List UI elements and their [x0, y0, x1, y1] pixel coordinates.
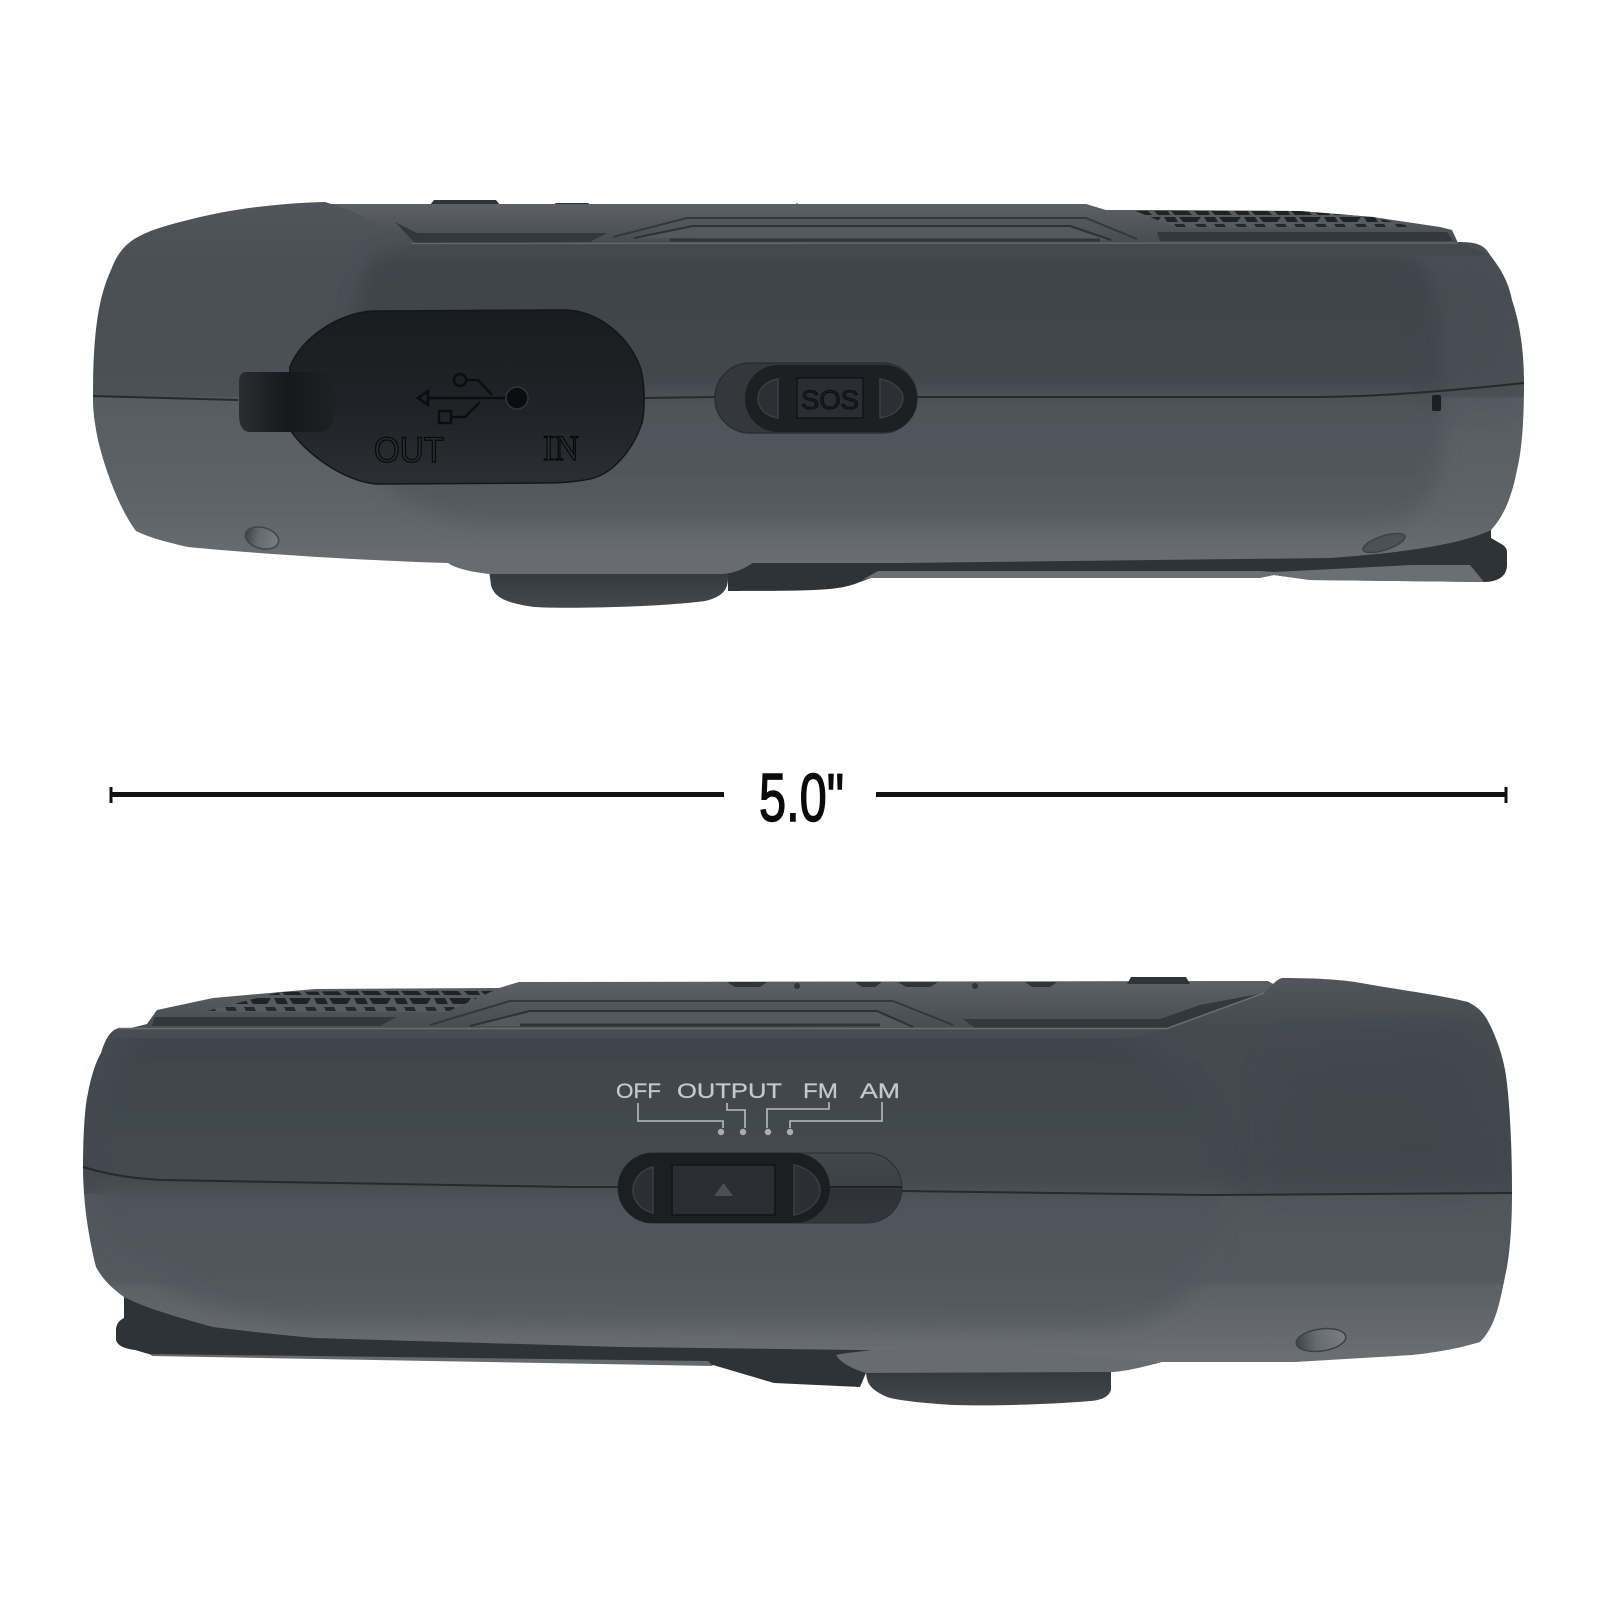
mounting clip: [116, 1295, 880, 1387]
door cover: [287, 310, 644, 484]
circuit leader lines: [638, 1102, 882, 1128]
panel shadow bands: [152, 993, 1264, 1028]
left grip: [758, 379, 778, 418]
slider: [618, 1153, 830, 1223]
switch recess: [715, 363, 917, 433]
body top highlight: [412, 242, 1458, 244]
top panel: [325, 204, 1458, 243]
left grip: [633, 1167, 653, 1213]
right grip: [794, 1165, 820, 1215]
clip light strip: [862, 565, 1484, 582]
right grip: [880, 379, 903, 418]
recessed housing shade: [350, 252, 1444, 522]
mounting clip: [728, 505, 1507, 591]
recessed housing shade: [188, 1286, 1183, 1326]
upper rim: [1490, 254, 1491, 255]
mode switch: [618, 1153, 902, 1223]
door tab: [239, 372, 336, 432]
top edge buttons: [430, 200, 873, 208]
seam: [93, 383, 1524, 400]
device: top side view with USB door and SOS switch: [80, 195, 1540, 608]
speaker grille: [203, 989, 497, 1012]
USB icon: [418, 374, 505, 423]
seam: [83, 1167, 1512, 1195]
left segment: [110, 792, 724, 797]
ridged panel bands: [636, 226, 1111, 240]
label AM: AM: [860, 1080, 900, 1103]
right end tick: [1504, 787, 1508, 803]
slider button: [672, 1165, 775, 1215]
USB door: [239, 310, 644, 484]
switch labels: [616, 1080, 900, 1103]
dial cap: [448, 554, 754, 574]
ridged panel lines: [613, 218, 1137, 240]
indicator dots: [718, 1129, 793, 1135]
housing body: [80, 195, 1540, 575]
dimension line: 5.0 inches: [110, 760, 1508, 836]
USB icon port dot: [506, 387, 528, 409]
left end tick: [110, 787, 112, 803]
track seam: [825, 1186, 902, 1188]
pinhole: [1432, 395, 1441, 411]
top edge buttons: [727, 977, 1190, 989]
screw hole right: [1361, 530, 1407, 556]
body top highlight: [119, 993, 1264, 1028]
triangle mark: [714, 1183, 733, 1196]
device: bottom side view with mode switch: [70, 970, 1530, 1405]
speaker grille: [1133, 210, 1413, 228]
thumb dial: [866, 1370, 1111, 1405]
rim under panel: [110, 1028, 1167, 1038]
clip light strip: [150, 1354, 713, 1366]
label OFF: OFF: [616, 1080, 661, 1103]
ridged panel lines: [430, 1001, 953, 1027]
SOS button: [797, 378, 863, 418]
dimension value: 5.0": [759, 760, 844, 836]
label IN: IN: [543, 428, 579, 468]
panel shadow bands: [395, 222, 1453, 243]
right segment: [876, 792, 1506, 797]
screw hole left: [243, 523, 281, 553]
label OUT: OUT: [374, 431, 444, 470]
right shade: [1280, 1050, 1475, 1180]
SOS switch: [715, 363, 917, 433]
ridged panel band: [470, 1011, 913, 1027]
infographic canvas: [82, 200, 1524, 1406]
top panel: [119, 981, 1284, 1031]
slider: [745, 365, 917, 432]
switch track: [618, 1153, 902, 1223]
label OUTPUT: OUTPUT: [677, 1080, 782, 1103]
dial cap: [836, 1348, 1162, 1373]
SOS text: SOS: [801, 385, 859, 415]
screw hole: [1295, 1326, 1347, 1354]
thumb dial: [489, 570, 728, 608]
label FM: FM: [803, 1080, 838, 1103]
right shade: [1488, 252, 1521, 338]
housing body: [70, 970, 1530, 1370]
